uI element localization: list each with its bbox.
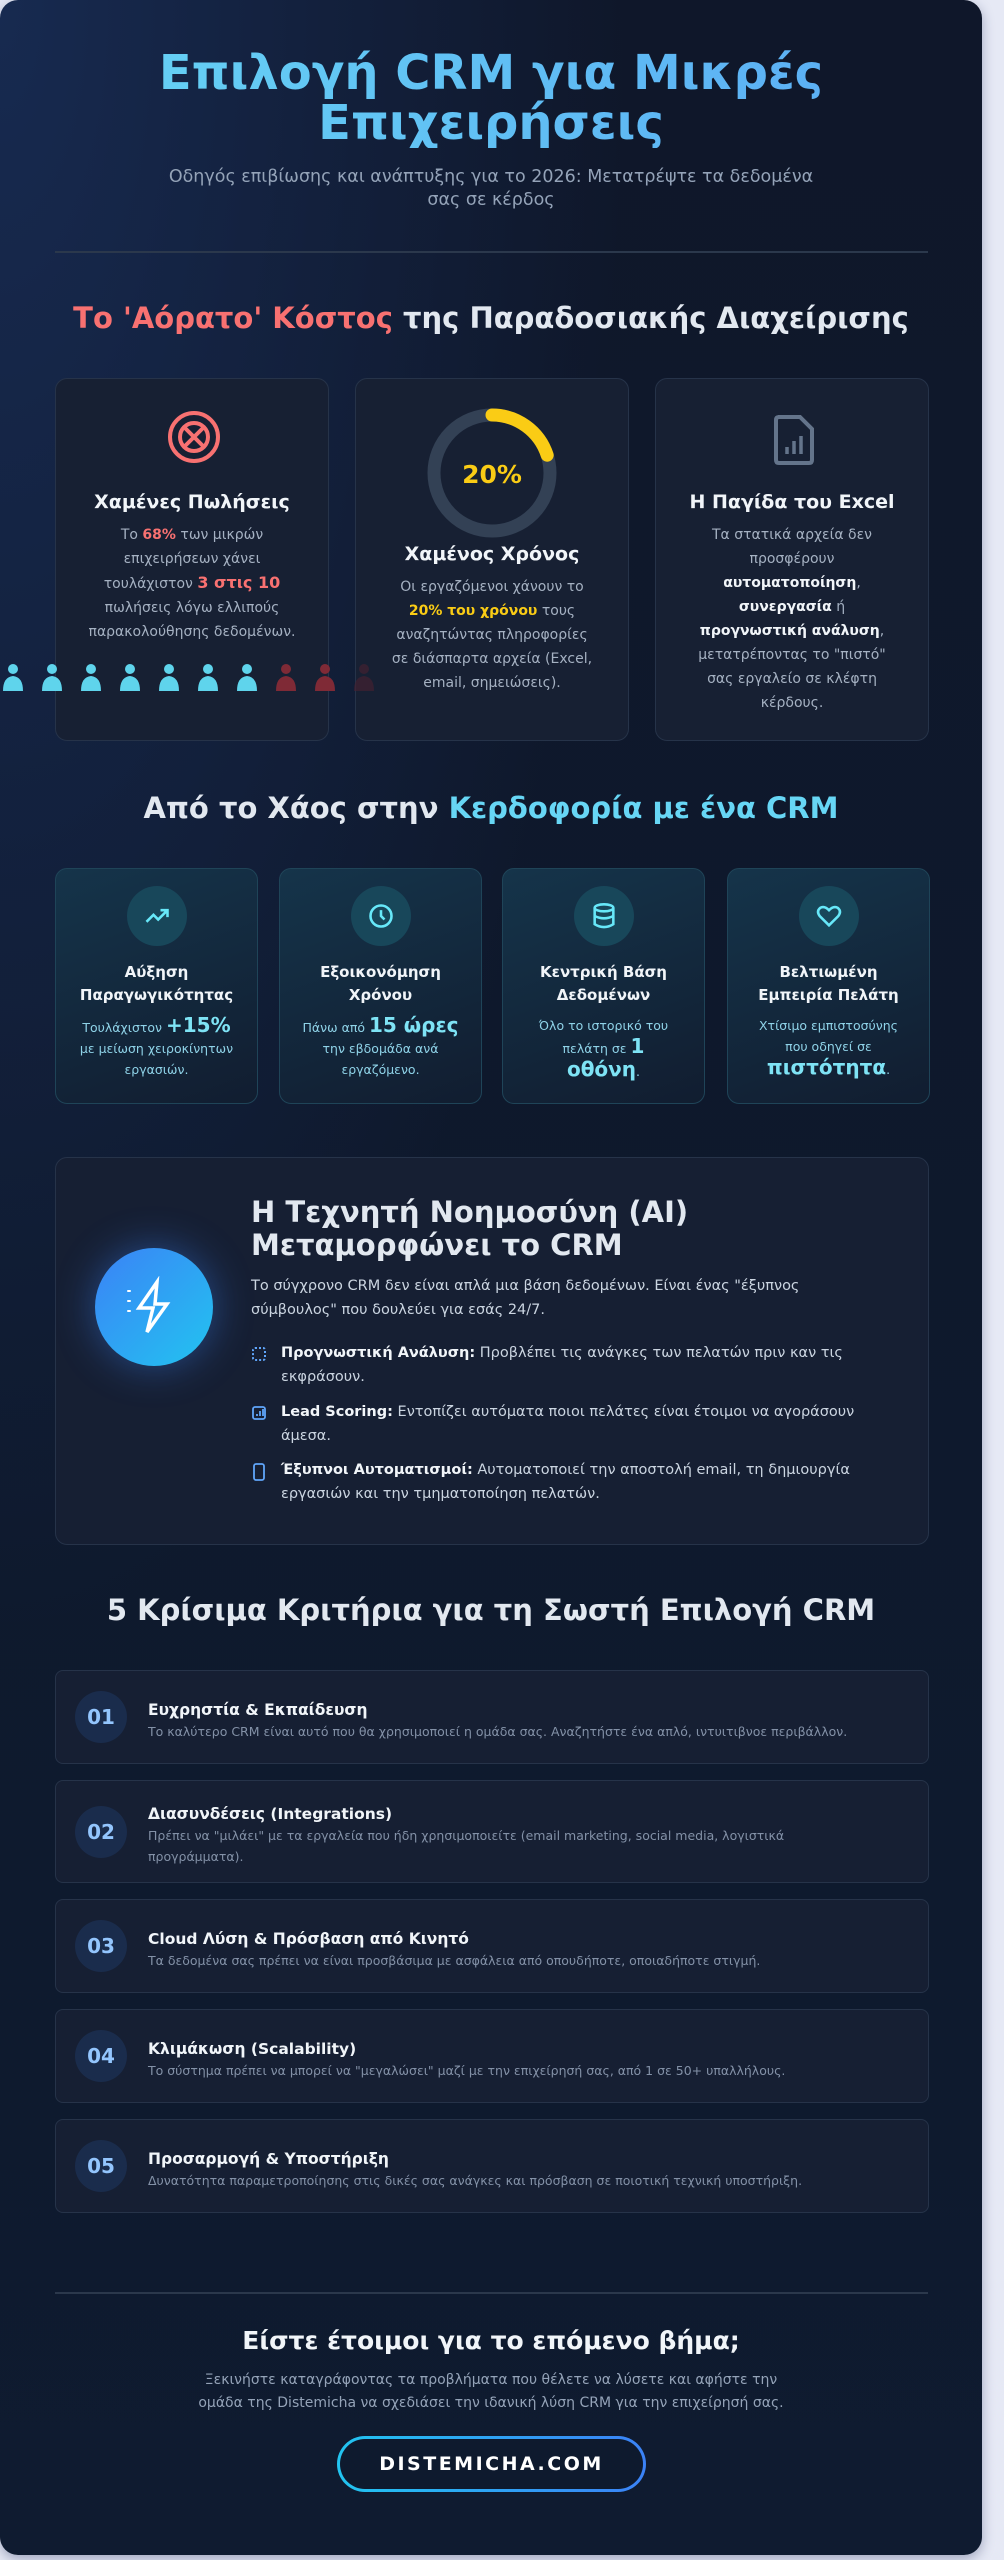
subtitle: Οδηγός επιβίωσης και ανάπτυξης για το 2026: Μετατρέψτε τα δεδομένα — [169, 167, 813, 187]
card text: τουλάχιστον 3 στις 10 — [104, 573, 280, 592]
panel: central db: Κεντρική Βάση — [540, 963, 667, 981]
criterion 03: 03 — [87, 1934, 115, 1958]
card text: 20% του χρόνου τους — [409, 603, 575, 619]
panel: time saving: Πάνω από 15 ώρες — [303, 1013, 458, 1037]
panel: productivity: Αύξηση — [125, 963, 188, 981]
criterion 04 — [55, 2009, 929, 2103]
panel: time saving: την εβδομάδα ανά εργαζόμενο. — [323, 1041, 438, 1077]
bullet: predictive: Προγνωστική Ανάλυση: Προβλέπει τις ανάγκες των πελατών πριν καν τις εκφράσουν. — [281, 1345, 843, 1385]
icon: clock — [351, 886, 411, 946]
panel: AI — [55, 1157, 929, 1545]
AI title: Μεταμορφώνει το CRM — [251, 1228, 623, 1262]
heading: chaos to profit: Από το Χάος στην Κερδοφορία με ένα CRM — [144, 791, 838, 825]
card text: κέρδους. — [761, 695, 823, 711]
panel: central db: Όλο το ιστορικό του πελάτη σε 1 οθόνη. — [539, 1018, 668, 1081]
donut chart 20% — [428, 408, 556, 538]
footer heading: Είστε έτοιμοι για το επόμενο βήμα; — [242, 2326, 740, 2355]
panel: time saving — [279, 868, 482, 1104]
panel: customer experience — [727, 868, 930, 1104]
icon: lost sales — [168, 411, 220, 463]
panel: productivity: Τουλάχιστον +15% — [82, 1013, 231, 1037]
card text: σε διάσπαρτα αρχεία (Excel, — [392, 651, 592, 667]
criterion 05: 05 — [87, 2154, 115, 2178]
card text: προγνωστική ανάλυση, — [700, 623, 884, 639]
panel: lost sales — [55, 378, 329, 741]
button: distemicha.com — [337, 2436, 646, 2492]
panel: time saving: Εξοικονόμηση — [320, 963, 441, 981]
panel: productivity: με μείωση χειροκίνητων εργασιών. — [80, 1041, 233, 1077]
card text: αναζητώντας πληροφορίες — [396, 627, 588, 643]
title — [0, 48, 982, 148]
heading: invisible cost: Το 'Αόρατο' Κόστος της Παραδοσιακής Διαχείρισης — [73, 301, 909, 335]
card text: μετατρέποντας το "πιστό" — [698, 647, 886, 663]
criterion 04: Το σύστημα πρέπει να μπορεί να "μεγαλώσει" μαζί με την επιχείρησή σας, από 1 σε 50+ υπαλλήλους. — [148, 2063, 785, 2078]
title: Επιλογή CRM για Μικρές — [159, 45, 823, 101]
criterion 03: Cloud Λύση & Πρόσβαση από Κινητό — [148, 1930, 469, 1948]
card text: Τα στατικά αρχεία δεν — [712, 527, 872, 543]
criterion 03: Τα δεδομένα σας πρέπει να είναι προσβάσιμα με ασφάλεια από οπουδήποτε, οποιαδήποτε στιγμή. — [148, 1953, 760, 1968]
panel: productivity — [55, 868, 258, 1104]
icon: file chart — [774, 415, 814, 465]
footer text: Ξεκινήστε καταγράφοντας τα προβλήματα που θέλετε να λύσετε και αφήστε την ομάδα της Distemicha να σχεδιάσει την ιδανική λύση CRM για την επιχείρησή σας. — [198, 2372, 784, 2411]
criterion 04: 04 — [87, 2044, 115, 2068]
card title: Η Παγίδα του Excel — [689, 491, 895, 513]
bullet: automation: Έξυπνοι Αυτοματισμοί: Αυτοματοποιεί την αποστολή email, τη δημιουργία εργασιών και την τμηματοποίηση πελατών. — [281, 1462, 850, 1502]
criterion 04: Κλιμάκωση (Scalability) — [148, 2040, 356, 2058]
icon: database — [574, 886, 634, 946]
icon: AI glow circle — [95, 1248, 213, 1366]
icon: heart — [799, 886, 859, 946]
panel: central db — [502, 868, 705, 1104]
panel: productivity: Παραγωγικότητας — [80, 986, 233, 1004]
card text: σας εργαλείο σε κλέφτη — [707, 671, 877, 687]
panel: customer experience: Εμπειρία Πελάτη — [758, 986, 899, 1004]
panel: excel trap — [655, 378, 929, 741]
panel: time saving: Χρόνου — [349, 986, 412, 1004]
criterion 01: Ευχρηστία & Εκπαίδευση — [148, 1701, 368, 1719]
panel: customer experience: Χτίσιμο εμπιστοσύνης που οδηγεί σε πιστότητα. — [759, 1018, 898, 1079]
subtitle: σας σε κέρδος — [427, 190, 555, 210]
AI intro: Το σύγχρονο CRM δεν είναι απλά μια βάση δεδομένων. Είναι ένας "έξυπνος σύμβουλος" που δουλεύει για εσάς 24/7. — [251, 1278, 799, 1318]
card text: συνεργασία ή — [739, 599, 845, 615]
panel: lost time — [355, 378, 629, 741]
card text — [89, 527, 295, 640]
criterion 01: 01 — [87, 1705, 115, 1729]
bullet: lead scoring: Lead Scoring: Εντοπίζει αυτόματα ποιοι πελάτες είναι έτοιμοι να αγοράσουν άμεσα. — [281, 1404, 854, 1444]
card text — [392, 579, 592, 691]
card text: παρακολούθησης δεδομένων. — [89, 624, 295, 640]
criterion 05: Προσαρμογή & Υποστήριξη — [148, 2150, 389, 2168]
criterion 01: Το καλύτερο CRM είναι αυτό που θα χρησιμοποιεί η ομάδα σας. Αναζητήστε ένα απλό, ιντυιτιβνοε περιβάλλον. — [148, 1724, 847, 1739]
criterion 02 — [55, 1780, 929, 1883]
card title: Χαμένες Πωλήσεις — [94, 491, 290, 513]
criterion 05: Δυνατότητα παραμετροποίησης στις δικές σας ανάγκες και πρόσβαση σε ποιοτική τεχνική υποστήριξη. — [148, 2173, 802, 2188]
panel: central db: Δεδομένων — [557, 986, 650, 1004]
criterion 02: Πρέπει να "μιλάει" με τα εργαλεία που ήδη χρησιμοποιείτε (email marketing, social media, λογιστικά προγράμματα). — [148, 1828, 784, 1864]
criterion 05 — [55, 2119, 929, 2213]
card text: πωλήσεις λόγω ελλιπούς — [105, 600, 279, 616]
card text: αυτοματοποίηση, — [723, 575, 861, 591]
criterion 02: Διασυνδέσεις (Integrations) — [148, 1805, 392, 1823]
donut chart 20%: 20% — [462, 460, 522, 489]
card text: Το 68% των μικρών — [121, 527, 263, 543]
AI title — [251, 1195, 688, 1262]
card text — [698, 527, 886, 711]
card text: προσφέρουν — [750, 551, 834, 567]
card text: email, σημειώσεις). — [423, 675, 561, 691]
criterion 03 — [55, 1899, 929, 1993]
heading: criteria: 5 Κρίσιμα Κριτήρια για τη Σωστή Επιλογή CRM — [107, 1593, 875, 1627]
title: Επιχειρήσεις — [318, 95, 664, 151]
button: distemicha.com: DISTEMICHA.COM — [379, 2453, 604, 2475]
AI title: Η Τεχνητή Νοημοσύνη (AI) — [251, 1195, 688, 1229]
card text: επιχειρήσεων χάνει — [124, 551, 260, 567]
card title: Χαμένος Χρόνος — [405, 543, 579, 565]
card text: Οι εργαζόμενοι χάνουν το — [400, 579, 584, 595]
criterion 02: 02 — [87, 1820, 115, 1844]
people icons row — [3, 664, 374, 691]
panel: customer experience: Βελτιωμένη — [779, 963, 878, 981]
icon: trend — [127, 886, 187, 946]
criterion 01 — [55, 1670, 929, 1764]
subtitle — [169, 167, 813, 210]
